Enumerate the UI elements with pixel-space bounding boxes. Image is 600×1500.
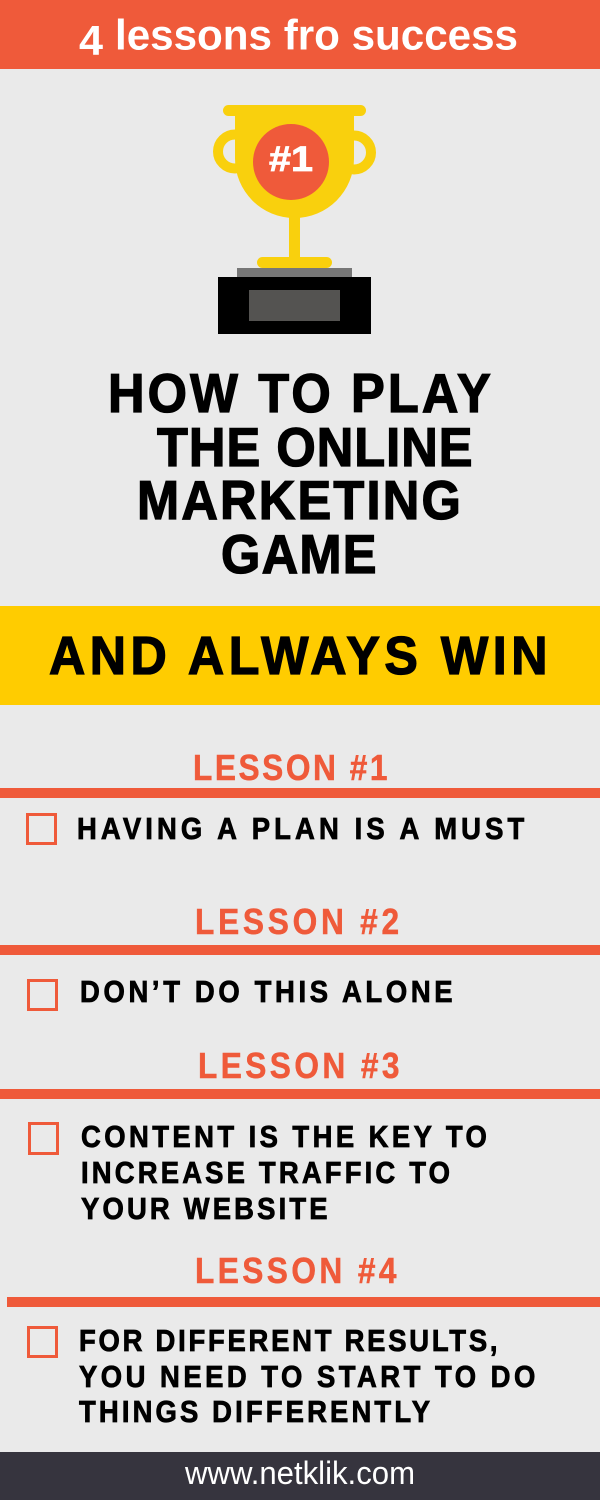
footer: www.netklik.com	[184, 1455, 415, 1491]
lesson 4: THINGS DIFFERENTLY	[79, 1396, 430, 1429]
lesson 3	[0, 1046, 600, 1226]
subtitle banner: AND ALWAYS WIN	[49, 626, 547, 686]
lesson 2: DON’T DO THIS ALONE	[80, 976, 453, 1009]
lesson 1: HAVING A PLAN IS A MUST	[77, 813, 525, 846]
lesson 2	[0, 902, 600, 1010]
title: GAME	[221, 524, 376, 585]
title	[108, 363, 491, 585]
lesson 4	[7, 1251, 600, 1429]
lesson 3: INCREASE TRAFFIC TO	[81, 1157, 450, 1190]
lesson 1: LESSON #1	[193, 748, 387, 788]
lesson 4: LESSON #4	[195, 1251, 397, 1291]
lesson 3: CONTENT IS THE KEY TO	[81, 1121, 487, 1154]
lesson 4: FOR DIFFERENT RESULTS,	[79, 1325, 498, 1358]
lesson 3: YOUR WEBSITE	[81, 1193, 328, 1226]
title: HOW TO PLAY	[108, 363, 491, 424]
subtitle banner	[0, 606, 600, 705]
lesson 1	[0, 748, 600, 846]
icon: trophy: #1	[269, 140, 313, 179]
icon: trophy	[218, 105, 371, 334]
header banner	[0, 0, 600, 69]
header banner: 4	[79, 17, 104, 64]
lesson 2: LESSON #2	[195, 902, 399, 942]
lesson 3: LESSON #3	[198, 1046, 400, 1086]
header banner: lessons fro success	[115, 12, 518, 60]
footer	[0, 1452, 600, 1500]
title: THE ONLINE	[157, 417, 473, 478]
title: MARKETING	[137, 470, 461, 531]
lesson 4: YOU NEED TO START TO DO	[79, 1361, 535, 1394]
